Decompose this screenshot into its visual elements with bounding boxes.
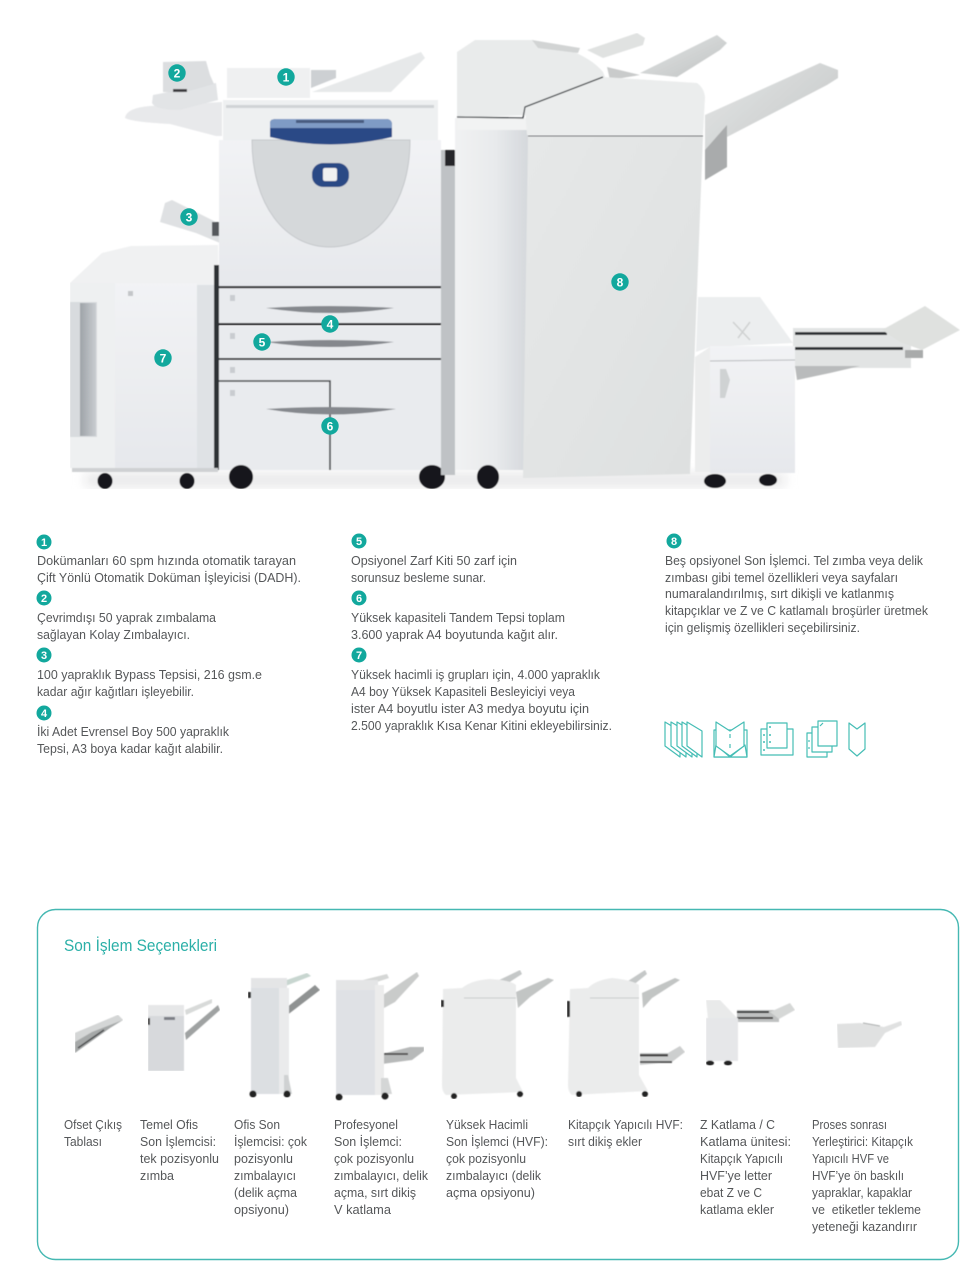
label: professional finisher	[334, 1117, 428, 1217]
main printer paper trays	[219, 286, 441, 470]
feature 7: 7	[356, 650, 362, 662]
label: professional finisher: Profesyonel	[334, 1117, 398, 1132]
feature 5	[351, 534, 517, 585]
finisher wheel	[477, 465, 499, 489]
heading: Son İşlem Seçenekleri	[64, 936, 217, 955]
feature 6	[351, 590, 565, 642]
label: office finisher	[234, 1117, 307, 1217]
product: Z and C folder	[706, 1000, 795, 1066]
feature 2	[36, 590, 217, 642]
product: booklet maker high volume finisher	[567, 970, 685, 1097]
feature 4: İki Adet Evrensel Boy 500 yapraklık	[37, 724, 229, 739]
label: high volume finisher	[446, 1117, 548, 1200]
feature 4: 4	[41, 708, 48, 720]
product: high volume finisher	[441, 970, 554, 1099]
blue control panel	[270, 119, 392, 144]
label: office finisher: zımbalayıcı	[234, 1168, 296, 1183]
feature 1: Dokümanları 60 spm hızında otomatik tarayan	[37, 553, 296, 568]
finisher body	[455, 40, 705, 478]
badge 5 on photo	[253, 333, 271, 351]
label: Z and C folder: Kitapçık Yapıcılı	[700, 1151, 783, 1166]
label: Z and C folder: katlama ekler	[700, 1202, 775, 1217]
panel border	[38, 910, 958, 1260]
main printer body	[219, 52, 441, 287]
feature 5: Opsiyonel Zarf Kiti 50 zarf için	[351, 553, 517, 568]
icon: stapled sheets	[807, 721, 837, 757]
label: high volume finisher: Son İşlemci (HVF):	[446, 1134, 548, 1149]
feature 2: 2	[41, 593, 47, 605]
feature 6: 6	[356, 593, 362, 605]
feature 4	[36, 706, 229, 756]
feature 3: kadar ağır kağıtları işleyebilir.	[37, 684, 194, 699]
label: offset tray: Tablası	[64, 1134, 102, 1149]
label: post process inserter: Yapıcılı HVF ve	[812, 1151, 889, 1166]
badge 2 on photo	[168, 64, 186, 82]
text column 3: feature 8: 8	[671, 536, 677, 548]
feature 7: Yüksek hacimli iş grupları için, 4.000 yapraklık	[351, 667, 600, 682]
label: high volume finisher: Yüksek Hacimli	[446, 1117, 528, 1132]
feature 3: 3	[41, 650, 47, 662]
folder wheels	[704, 474, 777, 488]
main printer wheels	[229, 465, 445, 489]
panel: finishing options	[38, 910, 958, 1260]
stapler shelf	[125, 61, 222, 136]
badge 7 on photo: 7	[160, 352, 167, 366]
badge 4 on photo	[321, 315, 339, 333]
label: high volume finisher: açma opsiyonu)	[446, 1185, 535, 1200]
badge 3 on photo: 3	[186, 210, 193, 224]
product photo: full printer system	[70, 33, 960, 489]
feature 7: 2.500 yapraklık Kısa Kenar Kitini ekleyebilirsiniz.	[351, 718, 612, 733]
icon: hole-punched sheets	[761, 723, 793, 755]
folder output rails and tray	[793, 306, 960, 380]
label: post process inserter: yapraklar, kapaklar	[812, 1185, 913, 1200]
label: professional finisher: açma, sırt dikiş	[334, 1185, 416, 1200]
connector strip	[441, 150, 455, 475]
feature 7: A4 boy Yüksek Kapasiteli Besleyiciyi veya	[351, 684, 576, 699]
badge 5 on photo: 5	[259, 336, 266, 350]
label: Z and C folder: Z Katlama / C	[700, 1117, 775, 1132]
label: Z and C folder	[700, 1117, 791, 1217]
label: professional finisher: çok pozisyonlu	[334, 1151, 414, 1166]
label: Z and C folder: HVF’ye letter	[700, 1168, 773, 1183]
label: basic office finisher: Son İşlemcisi:	[140, 1134, 216, 1149]
badge 3 on photo	[180, 208, 198, 226]
badge 1 on photo	[277, 68, 295, 86]
product: office finisher	[248, 973, 320, 1098]
product: professional finisher	[336, 972, 424, 1100]
feature 1	[36, 534, 301, 585]
feeder wheels	[98, 473, 194, 489]
label: post process inserter: HVF’ye ön baskılı	[812, 1168, 904, 1183]
label: booklet maker finisher	[568, 1117, 683, 1149]
text column 3: feature 8: kitapçıklar ve Z ve C katlamalı broşürler üretmek	[665, 603, 928, 618]
feature 7: ister A4 boyutlu ister A3 medya boyutu için	[351, 701, 589, 716]
label: professional finisher: zımbalayıcı, delik	[334, 1168, 428, 1183]
label: offset tray	[64, 1117, 122, 1149]
product: basic office finisher	[148, 999, 220, 1071]
label: basic office finisher: Temel Ofis	[140, 1117, 198, 1132]
feature 6: Yüksek kapasiteli Tandem Tepsi toplam	[351, 610, 565, 625]
text column 1: features 1 to 4	[36, 534, 301, 756]
grey dome	[252, 140, 410, 247]
badge 8 on photo: 8	[617, 276, 624, 290]
label: basic office finisher: zımba	[140, 1168, 175, 1183]
label: booklet maker finisher: sırt dikiş ekler	[568, 1134, 643, 1149]
label: high volume finisher: zımbalayıcı (delik	[446, 1168, 541, 1183]
label: post process inserter: Proses sonrası	[812, 1117, 887, 1132]
badge 6 on photo: 6	[327, 420, 334, 434]
text column 3: feature 8	[665, 534, 928, 635]
text column 3: feature 8: zımbası gibi temel özellikleri veya sayfaları	[665, 570, 898, 585]
text column 3: feature 8: Beş opsiyonel Son İşlemci. Tel zımba veya delik	[665, 553, 923, 568]
label: booklet maker finisher: Kitapçık Yapıcılı HVF:	[568, 1117, 683, 1132]
label: Z and C folder: ebat Z ve C	[700, 1185, 762, 1200]
text column 2: features 5 to 7	[351, 534, 612, 733]
label: post process inserter	[812, 1117, 921, 1234]
label: offset tray: Ofset Çıkış	[64, 1117, 122, 1132]
label: basic office finisher	[140, 1117, 219, 1183]
label: professional finisher: V katlama	[334, 1202, 392, 1217]
badge 4 on photo: 4	[327, 318, 334, 332]
high capacity feeder	[70, 245, 219, 472]
label: post process inserter: yeteneği kazandırır	[812, 1219, 918, 1234]
badge 1 on photo: 1	[283, 70, 290, 84]
feature 2: sağlayan Kolay Zımbalayıcı.	[37, 627, 190, 642]
finishing feature icons	[665, 721, 865, 757]
folder unit	[695, 297, 795, 473]
feature 1: Çift Yönlü Otomatik Doküman İşleyicisi (DADH).	[37, 570, 301, 585]
bypass tray	[160, 200, 220, 243]
feature 4: Tepsi, A3 boya kadar kağıt alabilir.	[37, 741, 223, 756]
badge 2 on photo: 2	[174, 66, 181, 80]
feature 5: 5	[356, 536, 362, 548]
label: office finisher: (delik açma	[234, 1185, 298, 1200]
text column 3: feature 8: numaralandırılmış, sırt dikişli ve katlanmış	[665, 586, 894, 601]
text column 3: feature 8: için gelişmiş özellikleri seçebilirsiniz.	[665, 620, 860, 635]
feature 1: 1	[41, 537, 47, 549]
label: post process inserter: ve etiketler tekleme	[812, 1202, 921, 1217]
product: inserter	[837, 1021, 902, 1048]
badge 7 on photo	[154, 349, 172, 367]
feature 7	[351, 648, 612, 733]
icon: folded leaflet	[849, 723, 865, 756]
label: post process inserter: Yerleştirici: Kitapçık	[812, 1134, 913, 1149]
finisher trays	[587, 33, 838, 180]
label: high volume finisher: çok pozisyonlu	[446, 1151, 526, 1166]
badge 6 on photo	[321, 417, 339, 435]
label: Z and C folder: Katlama ünitesi:	[700, 1134, 791, 1149]
feature 2: Çevrimdışı 50 yaprak zımbalama	[37, 610, 217, 625]
feature 3: 100 yapraklık Bypass Tepsisi, 216 gsm.e	[37, 667, 262, 682]
product: offset tray	[75, 1015, 123, 1053]
badge 8 on photo	[611, 273, 629, 291]
label: professional finisher: Son İşlemci:	[334, 1134, 402, 1149]
icon: open booklet	[714, 722, 747, 757]
label: office finisher: pozisyonlu	[234, 1151, 293, 1166]
Xerox button	[312, 163, 349, 187]
label: office finisher: İşlemcisi: çok	[234, 1134, 307, 1149]
label: basic office finisher: tek pozisyonlu	[140, 1151, 219, 1166]
feature 5: sorunsuz besleme sunar.	[351, 570, 486, 585]
feature 6: 3.600 yaprak A4 boyutunda kağıt alır.	[351, 627, 558, 642]
label: office finisher: Ofis Son	[234, 1117, 280, 1132]
feature 3	[36, 648, 262, 699]
icon: stacked pages	[665, 722, 702, 757]
label: office finisher: opsiyonu)	[234, 1202, 289, 1217]
floor shadow	[85, 474, 785, 486]
